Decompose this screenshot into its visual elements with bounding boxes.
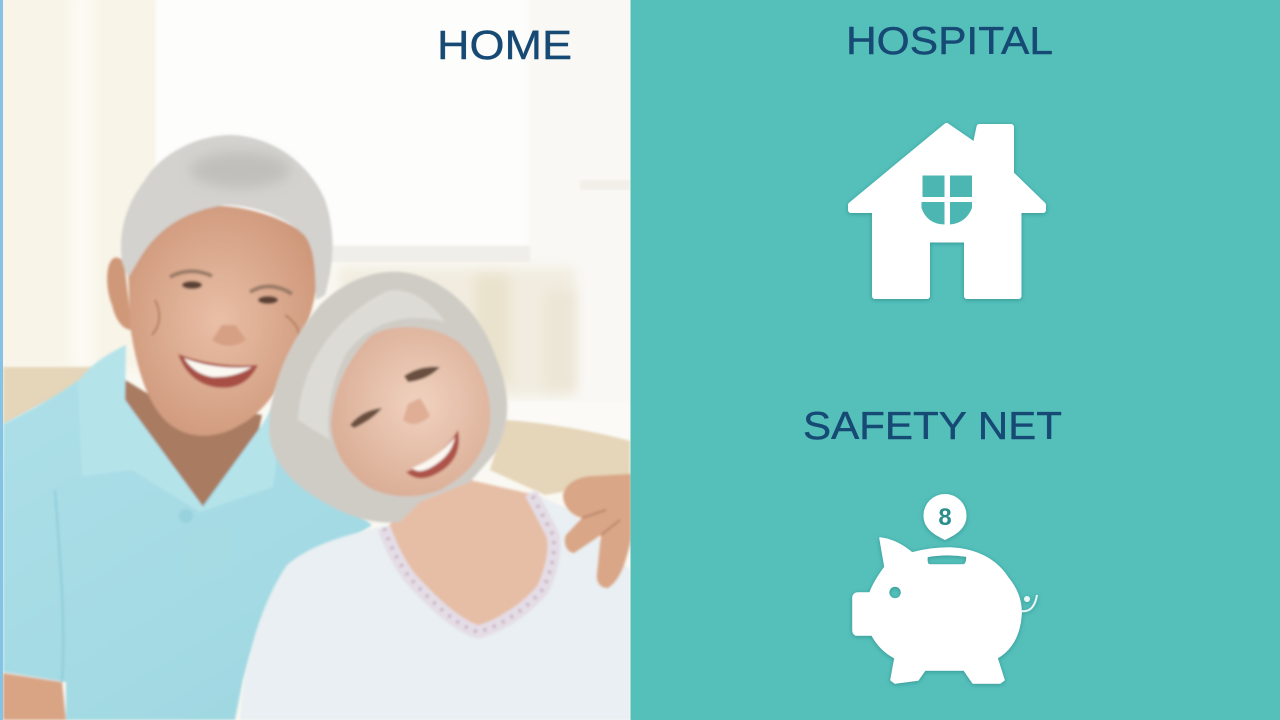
coin [924, 494, 966, 540]
man's hand on woman's shoulder [563, 474, 631, 588]
coin: 8 [938, 504, 952, 531]
man shirt placket and button [54, 490, 192, 682]
woman blouse [240, 492, 630, 720]
woman eyes [350, 367, 440, 428]
man hair [121, 135, 332, 300]
heading: HOME: HOME [437, 22, 572, 68]
woman face [331, 327, 490, 496]
pig body [853, 538, 1021, 683]
man hair shading [190, 152, 290, 188]
man collar [78, 345, 285, 512]
sofa [3, 367, 630, 495]
man [3, 135, 372, 720]
woman [240, 272, 630, 720]
man nose [212, 325, 246, 346]
panel: teal background [630, 0, 1280, 720]
woman hair highlight [298, 290, 445, 440]
man eyes and brows [152, 271, 300, 340]
left edge strip [0, 0, 3, 720]
man neck [124, 379, 264, 507]
photo background room [0, 0, 640, 720]
man smile [178, 354, 258, 388]
woman lace neckline [384, 493, 554, 632]
man arm [3, 673, 66, 720]
house window [922, 176, 972, 224]
heading: SAFETY NET: SAFETY NET [803, 405, 1062, 448]
woman neck and chest [386, 480, 555, 630]
woman hair [269, 272, 507, 523]
man polo shirt [3, 345, 372, 720]
pig tail [1021, 595, 1037, 611]
panel: photo of smiling senior couple [0, 0, 640, 720]
heading: HOSPITAL: HOSPITAL [846, 20, 1053, 63]
man ear [107, 258, 132, 330]
icon: house [851, 126, 1043, 296]
woman smile [406, 430, 459, 478]
icon: piggy bank with coin [853, 494, 1037, 683]
man face [128, 206, 317, 436]
woman nose [403, 398, 430, 424]
